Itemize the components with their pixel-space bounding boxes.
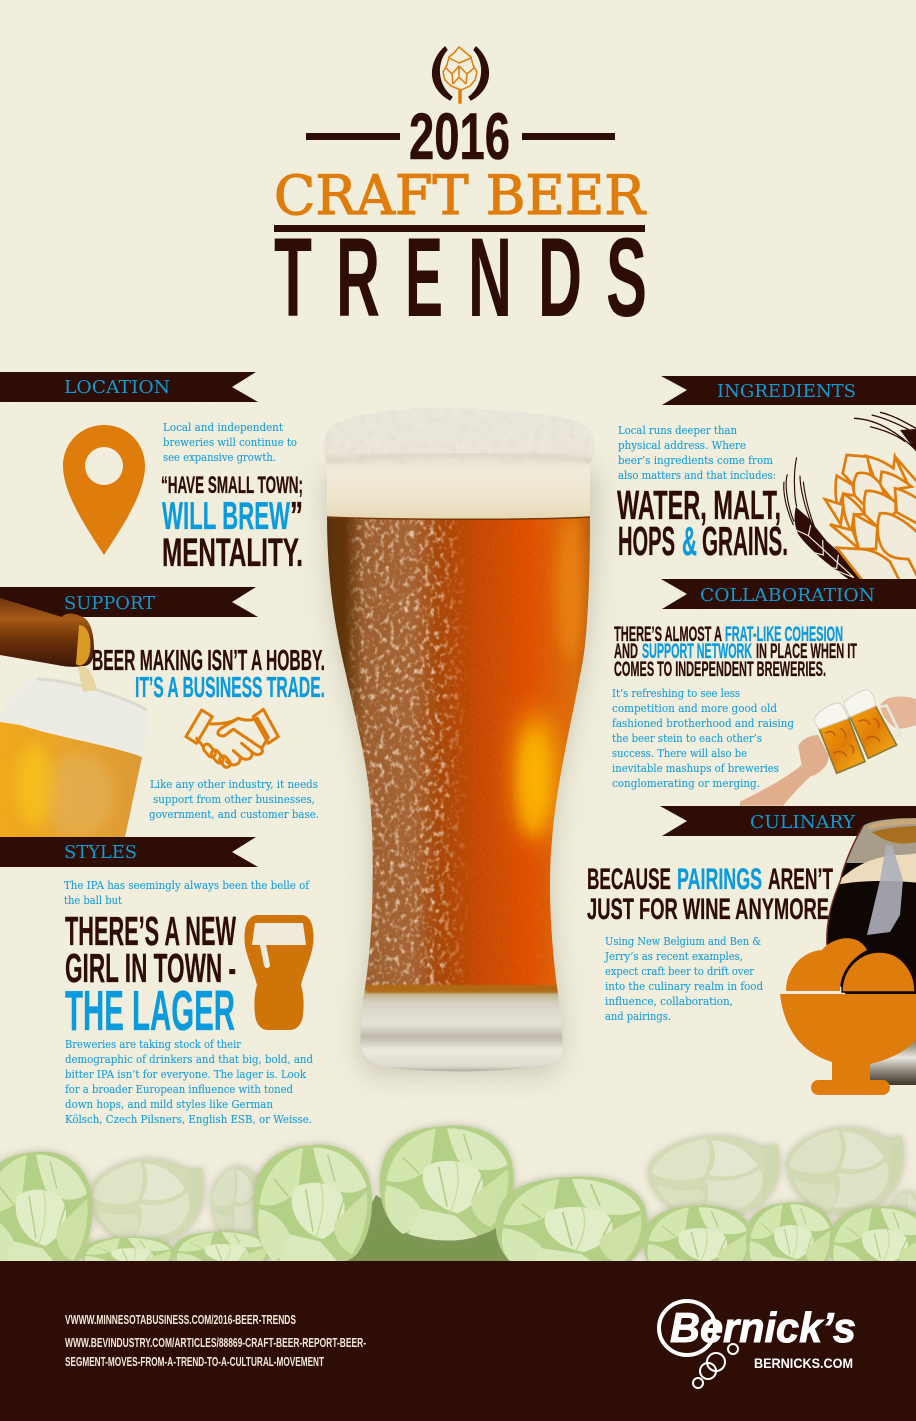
headline: water malt hops grains: HOPS (618, 518, 675, 564)
sources: WWW.BEVINDUSTRY.COM/ARTICLES/88869-CRAFT-BEER-REPORT-BEER- (65, 1335, 366, 1350)
body text: culinary: Using New Belgium and Ben & (605, 935, 761, 948)
headline: the lager: GIRL IN TOWN - (65, 945, 236, 991)
body text: styles: for a broader European influence with toned (65, 1083, 293, 1096)
glass highlight (867, 845, 903, 935)
glass shadow (327, 470, 596, 1074)
ribbon: ingredients: INGREDIENTS (717, 381, 856, 402)
body text: styles: demographic of drinkers and that big, bold, and (65, 1053, 313, 1066)
intro text: styles (64, 879, 310, 907)
heading: trends: T (274, 215, 312, 340)
body text: ingredients (618, 424, 776, 482)
image: dark beer glass (826, 818, 916, 1085)
panel: location (63, 421, 303, 575)
heading: trends (274, 215, 647, 340)
year 2016: 2016 (409, 99, 510, 173)
body text: support: government, and customer base. (149, 808, 319, 821)
body text: collaboration: competition and more good old (612, 702, 777, 715)
headline: frat-like cohesion: SUPPORT NETWORK (642, 640, 752, 663)
center beer glass (320, 404, 600, 1075)
headline: have small town: “HAVE SMALL TOWN; (161, 472, 303, 499)
headline: pairings: BECAUSE (587, 863, 671, 896)
body text: styles: Kölsch, Czech Pilsners, English ESB, or Weisse. (65, 1113, 312, 1126)
body text: ingredients: physical address. Where (618, 439, 746, 452)
body text: collaboration: fashioned brotherhood and raising (612, 717, 794, 730)
body text: location: breweries will continue to (163, 436, 297, 449)
heading: trends: E (405, 215, 443, 340)
logo: bernick's: BERNICKS.COM (754, 1355, 853, 1371)
headline: frat-like cohesion (614, 623, 857, 681)
panel: culinary (587, 815, 916, 1095)
ribbon: location (0, 372, 258, 402)
panel: collaboration (612, 623, 916, 806)
headline: water malt hops grains: GRAINS. (702, 518, 788, 564)
ribbon: ingredients (661, 376, 916, 405)
body text: culinary (604, 935, 763, 1023)
stein left (819, 718, 865, 773)
headline: have small town: WILL BREW (162, 495, 290, 538)
body text: location (163, 421, 297, 464)
body text: support (149, 778, 319, 821)
body text: location: Local and independent (163, 421, 284, 434)
headline: pairings: PAIRINGS (677, 863, 762, 896)
ribbon: styles: STYLES (64, 842, 137, 863)
wheat top right (854, 412, 916, 452)
headline: the lager: THERE’S A NEW (65, 908, 236, 954)
bright front row (0, 1122, 916, 1261)
heading: trends: S (606, 215, 647, 340)
body text: collaboration: conglomerating or merging. (612, 777, 760, 790)
sources: SEGMENT-MOVES-FROM-A-TREND-TO-A-CULTURAL-MOVEMENT (65, 1354, 324, 1369)
headline: hobby (92, 645, 325, 704)
warm highlight (520, 713, 552, 837)
image: tilted beer bottle (0, 598, 97, 692)
heading: trends: R (336, 215, 380, 340)
header: title block (274, 47, 647, 340)
headline: the lager (65, 908, 236, 1043)
stein right (850, 705, 897, 758)
body text: support: support from other businesses, (153, 793, 315, 806)
body text: culinary: and pairings. (605, 1010, 671, 1023)
body text: collaboration: inevitable mashups of breweries (612, 762, 779, 775)
ribbon: location: LOCATION (64, 377, 170, 398)
body text: support: Like any other industry, it needs (150, 778, 318, 791)
body text: collaboration: the beer stein to each other’s (612, 732, 762, 745)
headline: have small town: MENTALITY. (162, 531, 303, 575)
ribbon: support (0, 587, 258, 617)
body text: culinary: into the culinary realm in food (605, 980, 763, 993)
body text: ingredients: also matters and that includes: (618, 469, 776, 482)
intro text: styles: The IPA has seemingly always been the belle of (64, 879, 310, 892)
ribbon: collaboration (661, 579, 916, 609)
arm left (740, 735, 829, 806)
image: clinking beer steins (740, 690, 916, 806)
heading: trends: N (468, 215, 512, 340)
headline: pairings (587, 863, 833, 926)
body text: collaboration: It’s refreshing to see less (612, 687, 740, 700)
icon: pint glass (244, 915, 314, 1030)
glass rim (846, 818, 916, 863)
sources: VWWW.MINNESOTABUSINESS.COM/2016-BEER-TRENDS (65, 1312, 296, 1327)
large hop outline (825, 455, 916, 582)
panel: ingredients (617, 412, 916, 582)
body text: culinary: influence, collaboration, (605, 995, 733, 1008)
body text: culinary: expect craft beer to drift over (605, 965, 755, 978)
logo: bernick's (659, 1301, 856, 1388)
footer (0, 1261, 916, 1421)
ribbon: support: SUPPORT (64, 593, 155, 614)
body text: collaboration: success. There will also be (612, 747, 747, 760)
ribbon: culinary (660, 806, 916, 836)
headline: the lager: THE LAGER (65, 979, 235, 1043)
image: beer glass being filled (0, 677, 148, 837)
body text: culinary: Jerry’s as recent examples, (604, 950, 743, 963)
body text: styles: bitter IPA isn’t for everyone. The lager is. Look (65, 1068, 306, 1081)
headline: have small town (161, 472, 303, 575)
icon: hop with wheat laurel (432, 47, 488, 103)
dark leaves (340, 1195, 510, 1264)
panel: styles (64, 879, 314, 1126)
rule right of year (522, 133, 615, 140)
ribbon: styles (0, 837, 258, 867)
condensation (345, 517, 470, 987)
body text: styles: Breweries are taking stock of their (65, 1038, 242, 1051)
headline: pairings: AREN’T (768, 863, 833, 896)
illustration: hop and wheat (784, 412, 916, 582)
sources (65, 1312, 366, 1369)
headline: frat-like cohesion: AND (614, 640, 638, 663)
logo: bernick's: Bernick’s (670, 1304, 856, 1351)
headline: water malt hops grains: WATER, MALT, (617, 482, 781, 528)
body text: styles (65, 1038, 313, 1126)
icon: ice cream bowl (780, 938, 916, 1095)
headline: water malt hops grains (617, 482, 788, 564)
body text: ingredients: Local runs deeper than (618, 424, 737, 437)
panel: support (0, 598, 325, 837)
heading: craft beer: CRAFT BEER (274, 163, 647, 227)
beer body (320, 510, 600, 990)
intro text: styles: the ball but (64, 894, 123, 907)
hand right (880, 696, 916, 728)
headline: frat-like cohesion: THERE’S ALMOST A (614, 623, 722, 646)
headline: have small town: ” (290, 495, 303, 538)
glass base (360, 989, 563, 1072)
beer foam (835, 852, 916, 885)
hop cones band (0, 1126, 916, 1281)
body text: ingredients: beer’s ingredients come from (618, 454, 774, 467)
headline: water malt hops grains: & (682, 518, 697, 564)
ribbon: culinary: CULINARY (750, 812, 856, 833)
headline: hobby: BEER MAKING ISN’T A HOBBY. (92, 645, 325, 677)
foam head (320, 404, 600, 522)
ribbon: collaboration: COLLABORATION (700, 585, 875, 606)
wheat left stalk (783, 457, 860, 579)
body text: styles: down hops, and mild styles like German (65, 1098, 273, 1111)
icon: map pin (63, 425, 145, 555)
rule left of year (306, 133, 400, 140)
pale back row (89, 1127, 916, 1245)
body text: location: see expansive growth. (163, 451, 276, 464)
heading: trends: D (538, 215, 582, 340)
icon: handshake (186, 709, 278, 769)
headline: hobby: IT’S A BUSINESS TRADE. (135, 672, 325, 704)
body text: collaboration (612, 687, 794, 790)
rule under craft beer (274, 225, 645, 232)
